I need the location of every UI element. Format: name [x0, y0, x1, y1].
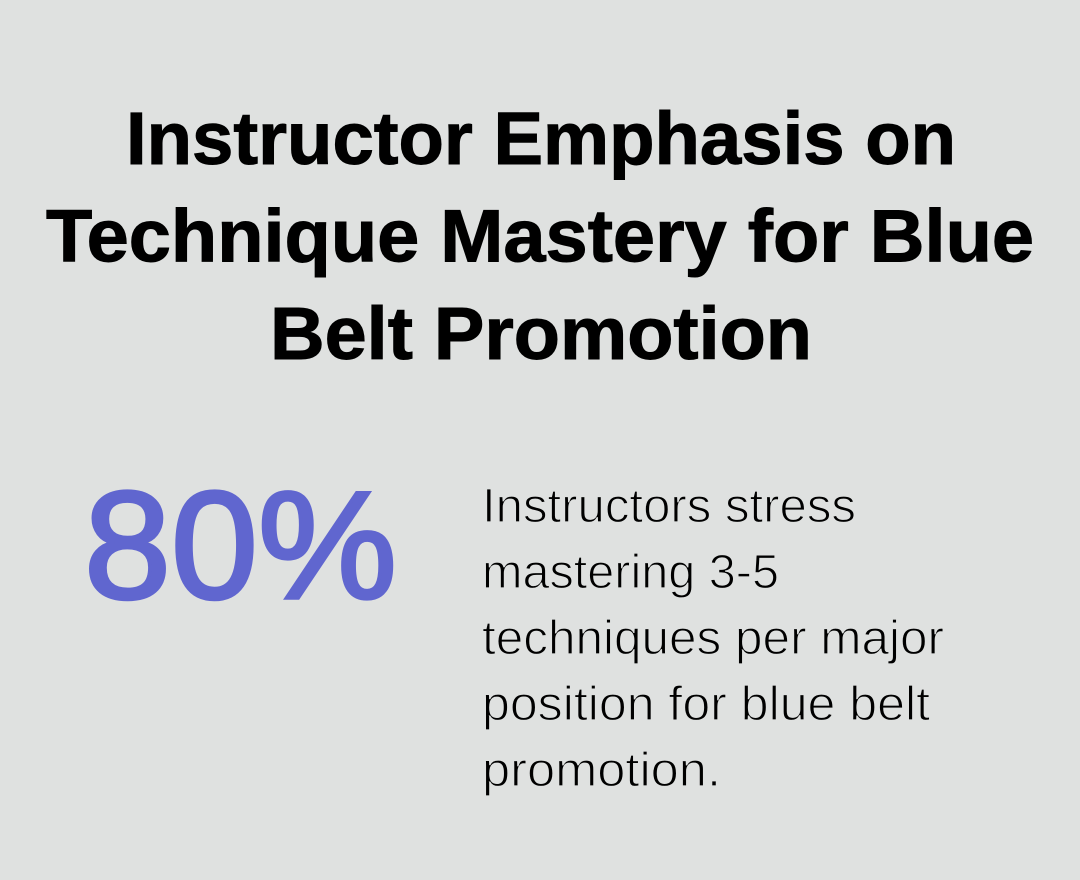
title: Instructor Emphasis on: [126, 97, 956, 180]
statistic description: techniques per major: [482, 612, 944, 665]
title: Technique Mastery for Blue: [46, 195, 1034, 278]
big statistic: 80%: 80%: [84, 460, 397, 631]
statistic description: promotion.: [482, 744, 721, 797]
statistic description: position for blue belt: [482, 678, 930, 731]
statistic description: [482, 480, 944, 797]
statistic description: mastering 3-5: [482, 546, 779, 599]
statistic description: Instructors stress: [482, 480, 856, 533]
title: Belt Promotion: [270, 292, 812, 375]
title: [46, 97, 1034, 375]
